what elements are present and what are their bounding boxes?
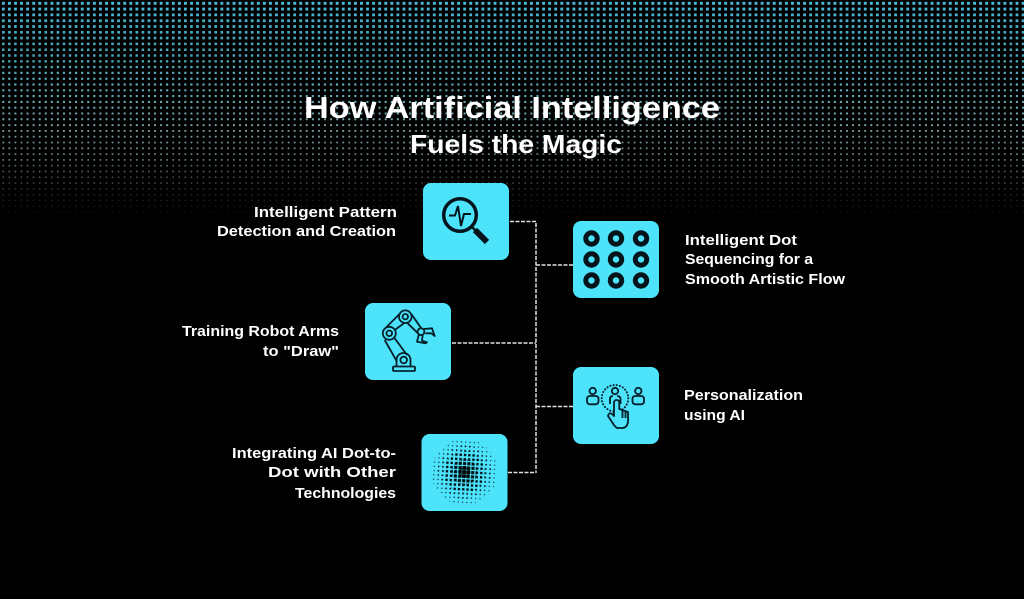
panel: dot sequencing xyxy=(573,221,845,298)
icon box: dots xyxy=(573,221,659,298)
dashed connector lines xyxy=(452,222,573,473)
title: Fuels the Magic xyxy=(410,129,622,159)
label: integrating technologies: Technologies xyxy=(295,485,396,502)
icon box: magnifier xyxy=(423,183,509,260)
icon: magnifying glass xyxy=(444,199,487,242)
label: robot arms xyxy=(182,323,339,360)
panel: robot arms xyxy=(182,303,451,380)
label: personalization: using AI xyxy=(684,407,745,424)
label: dot sequencing: Sequencing for a xyxy=(685,251,814,268)
label: integrating technologies: Dot with Other xyxy=(268,464,396,481)
label: dot sequencing: Smooth Artistic Flow xyxy=(685,271,845,288)
label: pattern detection: Detection and Creation xyxy=(217,223,396,240)
title: How Artificial Intelligence xyxy=(304,90,720,125)
label: pattern detection: Intelligent Pattern xyxy=(254,204,397,221)
label: dot sequencing xyxy=(685,232,845,288)
label: personalization: Personalization xyxy=(684,387,803,404)
icon: users and pointing hand xyxy=(587,385,644,428)
icon: robot arm xyxy=(383,310,435,371)
label: integrating technologies xyxy=(232,445,396,502)
icon box: halftone xyxy=(422,434,508,511)
icon: nine ring dots xyxy=(586,233,647,286)
label: integrating technologies: Integrating AI Dot-to- xyxy=(232,445,396,462)
icon: halftone dots xyxy=(432,439,498,505)
panel: personalization xyxy=(573,367,803,444)
label: robot arms: to "Draw" xyxy=(263,343,339,360)
label: dot sequencing: Intelligent Dot xyxy=(685,232,797,249)
label: robot arms: Training Robot Arms xyxy=(182,323,339,340)
icon box: people xyxy=(573,367,659,444)
icon box: robot xyxy=(365,303,451,380)
label: pattern detection xyxy=(217,204,397,240)
panel: pattern detection xyxy=(217,183,509,260)
panel: integrating technologies xyxy=(232,434,508,511)
dot grid background xyxy=(2,3,1024,212)
title xyxy=(304,90,720,159)
label: personalization xyxy=(684,387,803,424)
